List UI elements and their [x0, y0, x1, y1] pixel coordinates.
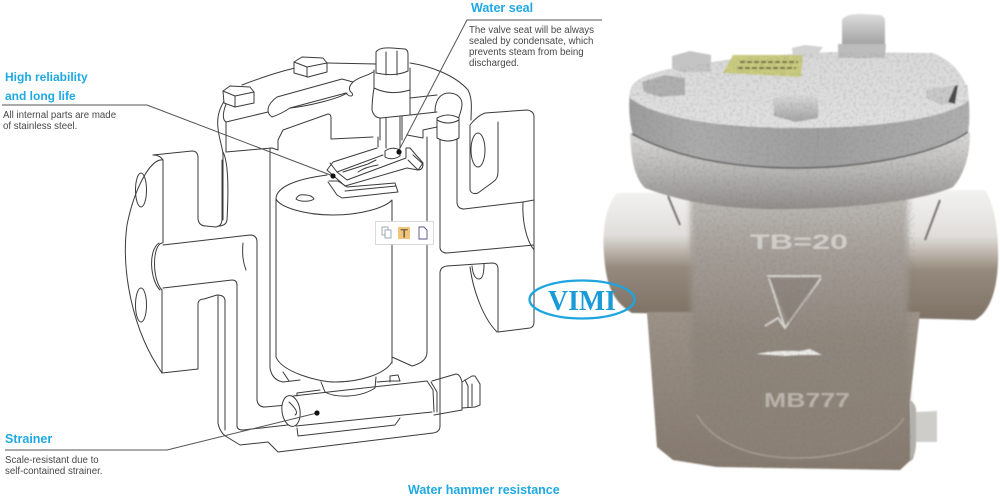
callout: water seal: [396, 1, 602, 155]
technical cutaway drawing of steam trap: [125, 48, 534, 452]
cast marking model: MB777: [764, 390, 850, 412]
name plate: [723, 55, 803, 77]
tall plug: [376, 48, 408, 75]
logo: VIMI: [530, 280, 634, 318]
cap shadow seam: [632, 132, 968, 168]
gasket ring: [630, 133, 970, 209]
left flange: [125, 110, 534, 452]
cap top: [630, 52, 969, 128]
lower body base: [647, 312, 920, 470]
embossed dash: [756, 349, 822, 356]
panel lower arc: [697, 415, 904, 458]
bucket float: [276, 175, 400, 396]
body centre panel: [690, 190, 908, 458]
cast marking TB-20: TB=20: [750, 231, 848, 254]
callout: water seal: The valve seat will be always: [469, 25, 594, 36]
callout: strainer: Strainer: [5, 432, 52, 446]
callout: high reliability: of stainless steel.: [3, 121, 77, 132]
port right: [900, 190, 998, 320]
callout: strainer: [5, 410, 320, 477]
icon: page: [419, 227, 427, 239]
photograph of steam trap: [604, 14, 998, 470]
icon: text highlight: T: [400, 226, 408, 240]
callout: high reliability: All internal parts are made: [3, 110, 116, 121]
strainer tube: [280, 374, 480, 436]
bolt middle: [294, 57, 327, 77]
callout: strainer: self-contained strainer.: [5, 466, 102, 477]
callout: water seal: sealed by condensate, which: [469, 36, 593, 47]
callout: strainer: Scale-resistant due to: [5, 455, 99, 466]
valve lever mechanism: [327, 137, 423, 198]
bolts: [773, 93, 818, 122]
bottom plug: [910, 400, 916, 462]
floating toolbar: [376, 222, 434, 244]
shoulder shadow marks: [668, 196, 940, 240]
valve body cover with bolts: [218, 48, 471, 382]
right flange and inlet: [435, 93, 534, 332]
heading: water hammer resistance: Water hammer resistance: [408, 483, 560, 497]
bolt left: [223, 86, 254, 107]
callout: high reliability: and long life: [5, 89, 76, 103]
callout: water seal: Water seal: [471, 1, 533, 15]
grain texture: [629, 52, 970, 470]
port left: [604, 192, 700, 314]
callout: high reliability: High reliability: [5, 70, 88, 84]
cap side: [629, 85, 969, 168]
icon: copy: [382, 227, 391, 238]
callout: water seal: discharged.: [469, 58, 519, 69]
logo: VIMI: VIMI: [548, 286, 616, 317]
plug: [842, 14, 885, 44]
callout: high reliability: [2, 70, 336, 179]
callout: water seal: prevents steam from being: [469, 47, 584, 58]
embossed triangle: [765, 276, 821, 328]
